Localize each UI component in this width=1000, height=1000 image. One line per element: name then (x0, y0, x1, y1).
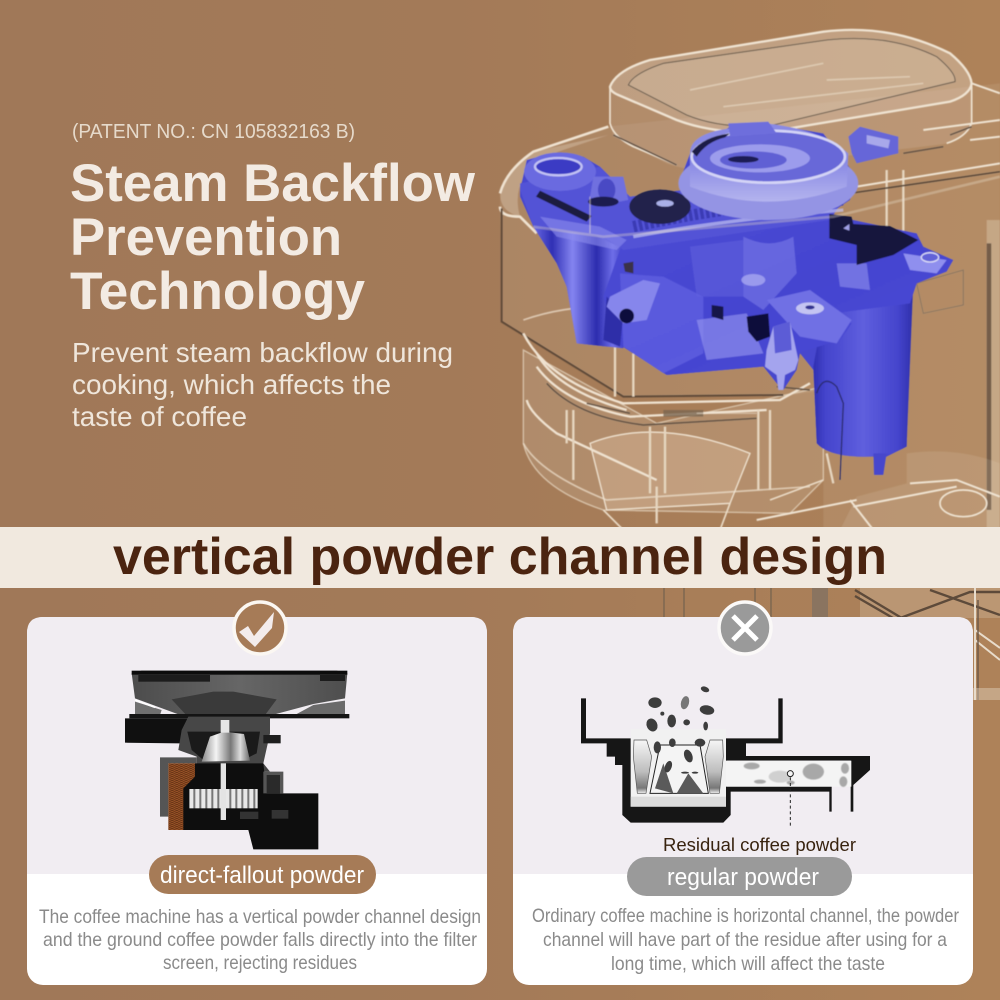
lid (610, 30, 972, 171)
description: long time, which will affect the taste (611, 953, 885, 975)
subtitle: cooking, which affects the (72, 369, 391, 400)
patent number: (PATENT NO.: CN 105832163 B) (72, 121, 355, 143)
coffee beans (644, 685, 715, 774)
title: Steam Backflow (70, 154, 476, 213)
icon: cross badge (719, 602, 771, 654)
panel: regular powder (513, 602, 973, 985)
bolt (796, 302, 824, 314)
description: and the ground coffee powder falls directly into the filter (43, 929, 477, 951)
small box (917, 270, 963, 313)
label pill (149, 855, 376, 894)
label pill (627, 857, 852, 896)
subtitle: taste of coffee (72, 401, 247, 432)
pointer (787, 771, 793, 777)
upper deck (520, 167, 857, 250)
main body (500, 83, 1000, 530)
shell front highlights (533, 177, 1000, 413)
banner: vertical powder channel design (113, 528, 887, 586)
right shoulder (857, 83, 1000, 187)
title: Prevention (70, 208, 342, 267)
title (70, 154, 476, 321)
nozzle (607, 280, 660, 323)
dark cavity (829, 214, 918, 265)
cylinder (813, 283, 913, 457)
description: The coffee machine has a vertical powder channel design (39, 906, 481, 928)
subtitle: Prevent steam backflow during (72, 337, 453, 368)
residue label: Residual coffee powder (663, 835, 856, 855)
panel: direct-fallout powder (27, 602, 487, 985)
label pill: regular powder (667, 864, 819, 891)
white tab right (903, 253, 947, 273)
diagram: horizontal channel with residue (581, 685, 870, 827)
label pill: direct-fallout powder (160, 862, 364, 889)
title: Technology (70, 262, 366, 321)
hopper tab (728, 122, 777, 137)
lower tray (757, 480, 1000, 530)
left cup (524, 152, 596, 191)
columns (567, 170, 903, 523)
black patches (747, 313, 770, 342)
base silhouette (520, 123, 953, 457)
dark bar (536, 191, 592, 222)
icon: check mark badge (234, 602, 286, 654)
black gear (629, 189, 691, 224)
diagram: vertical channel grinder cross-section (125, 671, 349, 849)
description (532, 905, 959, 975)
lower tank (523, 350, 823, 513)
hopper (678, 147, 858, 220)
funnel (590, 432, 750, 510)
main block (603, 220, 953, 375)
description: channel will have part of the residue after using for a (543, 929, 947, 951)
subtitle (72, 337, 453, 432)
valve (765, 322, 798, 390)
lower machine parts behind band, right (664, 588, 1000, 700)
chute (533, 227, 627, 348)
machine shell: translucent housing (500, 30, 1000, 530)
residue powder (744, 763, 849, 787)
illustration: transparent coffee machine with blue grinder module (500, 30, 1000, 530)
gear teeth ring (633, 200, 843, 227)
blue grinder module (520, 122, 953, 480)
right panel edge (987, 220, 1000, 530)
description: screen, rejecting residues (163, 952, 357, 974)
description (39, 906, 481, 974)
